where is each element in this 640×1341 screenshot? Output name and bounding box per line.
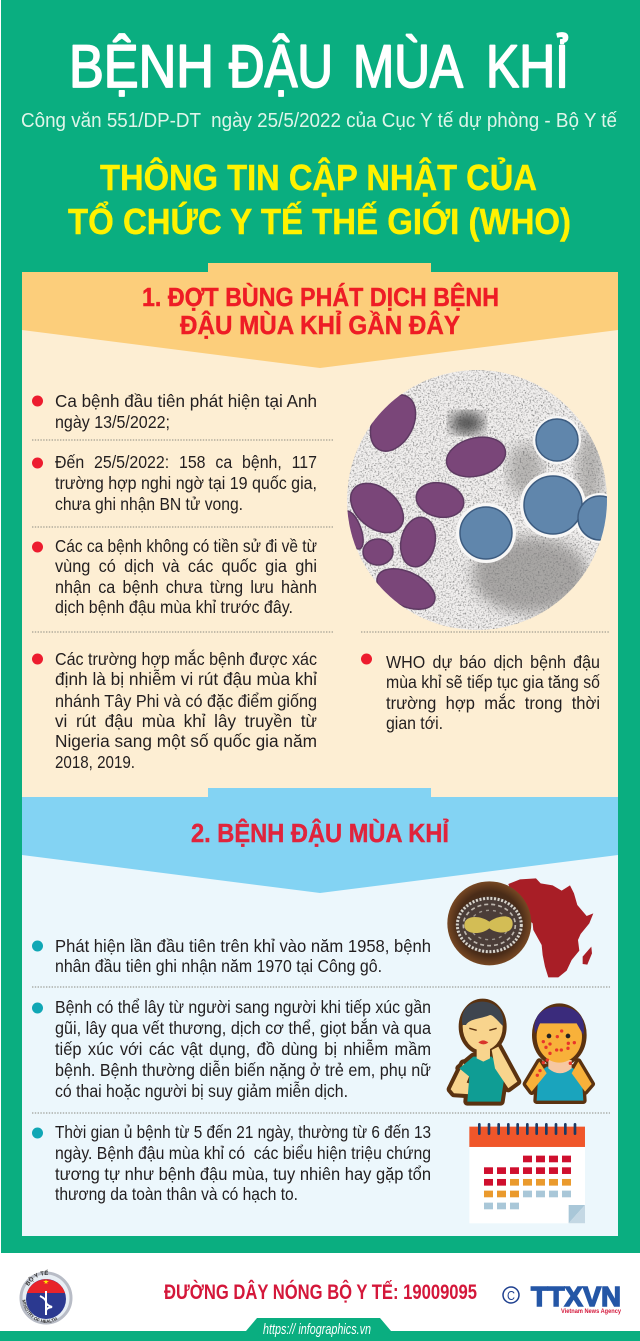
bullet: transmission xyxy=(32,997,431,1101)
bullet: no travel history: nhận ca bệnh chưa từng lưu hành xyxy=(55,577,317,597)
icon: Africa map with virus xyxy=(447,878,593,977)
bullet: WHO forecast: mùa khỉ sẽ tiếp tục gia tăng số xyxy=(386,672,600,692)
section 2 heading band xyxy=(22,788,618,893)
bullet: incubation: tương tự như bệnh đậu mùa, tuy nhiên hay gặp tổn xyxy=(55,1164,431,1184)
logo: TTXVN: TTXVN xyxy=(531,1281,621,1312)
bullet: WHO forecast: WHO dự báo dịch bệnh đậu xyxy=(386,652,600,672)
title: BỆNH xyxy=(69,33,214,100)
bullet: case counts xyxy=(32,452,317,514)
logo: Ministry of Health xyxy=(20,1270,72,1324)
bullet: case counts: trường hợp nghi ngờ tại 19 quốc gia, xyxy=(55,473,317,493)
copyright symbol xyxy=(503,1287,519,1303)
bullet: no travel history: Các ca bệnh không có tiền sử đi về từ xyxy=(55,536,317,556)
yellow heading: TỔ CHỨC Y TẾ THẾ GIỚI (WHO) xyxy=(68,199,571,242)
bullet: incubation xyxy=(32,1122,431,1204)
bullet: WHO forecast xyxy=(361,652,600,733)
bullet: first detected: nhân đầu tiên ghi nhận năm 1970 tại Công gô. xyxy=(55,956,382,976)
bullet: West Africa clade xyxy=(32,648,317,772)
bottom bar with URL xyxy=(0,1318,640,1341)
panel: 1. recent outbreak xyxy=(22,263,625,797)
bullet: first case: Ca bệnh đầu tiên phát hiện tại Anh xyxy=(55,391,317,411)
bullet: incubation: ngày. Bệnh đậu mùa khỉ có các biểu hiện triệu chứng xyxy=(55,1143,431,1163)
icon: calendar xyxy=(469,1124,585,1223)
title: MÙA xyxy=(353,33,463,100)
copyright symbol: C xyxy=(507,1288,515,1303)
bullet: transmission: tiếp xúc với các vật dụng, đồ dùng bị nhiễm mầm xyxy=(55,1038,431,1059)
section 1 heading: 1. ĐỢT BÙNG PHÁT DỊCH BỆNH xyxy=(142,282,499,312)
bullet: incubation: Thời gian ủ bệnh từ 5 đến 21 ngày, thường từ 6 đến 13 xyxy=(55,1122,431,1142)
section 2 heading: 2. BỆNH ĐẬU MÙA KHỈ xyxy=(191,818,449,848)
bullet: West Africa clade: Các trường hợp mắc bệnh được xác xyxy=(55,648,317,669)
bullet: West Africa clade: 2018, 2019. xyxy=(55,752,135,772)
bullet: transmission: Bệnh có thể lây từ người sang người khi tiếp xúc gần xyxy=(55,997,431,1017)
logo: Ministry of Health: MINISTRY OF HEALTH xyxy=(22,1300,58,1323)
bullet: West Africa clade: Nigeria sang một số quốc gia năm xyxy=(55,731,317,751)
bullet: first detected xyxy=(32,936,431,976)
bullet: no travel history: dịch bệnh đậu mùa khỉ trước đây. xyxy=(55,597,293,617)
micrograph of monkeypox virus xyxy=(339,370,625,630)
bullet: WHO forecast: trường hợp mắc trong thời xyxy=(386,692,600,713)
bullet: West Africa clade: nhánh Tây Phi và có đặc điểm giống xyxy=(55,691,317,711)
child with rash xyxy=(526,1007,592,1101)
hotline: ĐƯỜNG DÂY NÓNG BỘ Y TẾ: 19009095 xyxy=(164,1280,477,1304)
footer xyxy=(0,1270,640,1341)
subtitle: Công văn 551/DP-DT ngày 25/5/2022 của Cục Y tế dự phòng - Bộ Y tế xyxy=(21,110,617,132)
logo: Ministry of Health: BỘ Y TẾ xyxy=(25,1270,48,1286)
bullet: transmission: có thai hoặc người bị suy giảm miễn dịch. xyxy=(55,1080,348,1101)
section 1 heading band xyxy=(22,263,618,368)
sick adult xyxy=(451,1003,517,1102)
bullet: first case xyxy=(32,391,317,432)
bullet: no travel history xyxy=(32,536,317,617)
bullet: case counts: chưa ghi nhận BN tử vong. xyxy=(55,494,243,514)
yellow heading: THÔNG TIN CẬP NHẬT CỦA xyxy=(100,156,537,198)
yellow heading xyxy=(68,156,571,242)
bullet: transmission: bệnh. Bệnh thường diễn biến nặng ở trẻ em, phụ nữ xyxy=(55,1059,431,1080)
section 1 heading xyxy=(142,282,499,340)
title xyxy=(69,33,569,100)
bullet: first case: ngày 13/5/2022; xyxy=(55,412,170,432)
bullet: transmission: gũi, lây qua vết thương, dịch cơ thể, giọt bắn và qua xyxy=(55,1017,431,1038)
bullet: case counts: Đến 25/5/2022: 158 ca bệnh, 117 xyxy=(55,452,317,472)
bullet: West Africa clade: định là bị nhiễm vi rút đậu mùa khỉ xyxy=(55,668,317,689)
bullet: West Africa clade: vi rút đậu mùa khỉ lây truyền từ xyxy=(55,711,317,731)
bullet: incubation: thương da toàn thân và có hạch to. xyxy=(55,1184,298,1204)
bottom bar with URL: https:// infographics.vn xyxy=(263,1321,371,1338)
panel: 2. monkeypox disease xyxy=(22,788,618,1236)
bullet: WHO forecast: gian tới. xyxy=(386,713,443,733)
section 1 heading: ĐẬU MÙA KHỈ GẦN ĐÂY xyxy=(180,310,460,340)
title: ĐẬU xyxy=(229,33,333,100)
title: KHỈ xyxy=(486,33,569,100)
bullet: no travel history: vùng có dịch và các quốc gia ghi xyxy=(55,556,317,576)
icon: sick people xyxy=(451,1002,592,1102)
bullet: first detected: Phát hiện lần đầu tiên trên khỉ vào năm 1958, bệnh xyxy=(55,936,431,956)
logo: TTXVN: Vietnam News Agency xyxy=(561,1309,622,1315)
